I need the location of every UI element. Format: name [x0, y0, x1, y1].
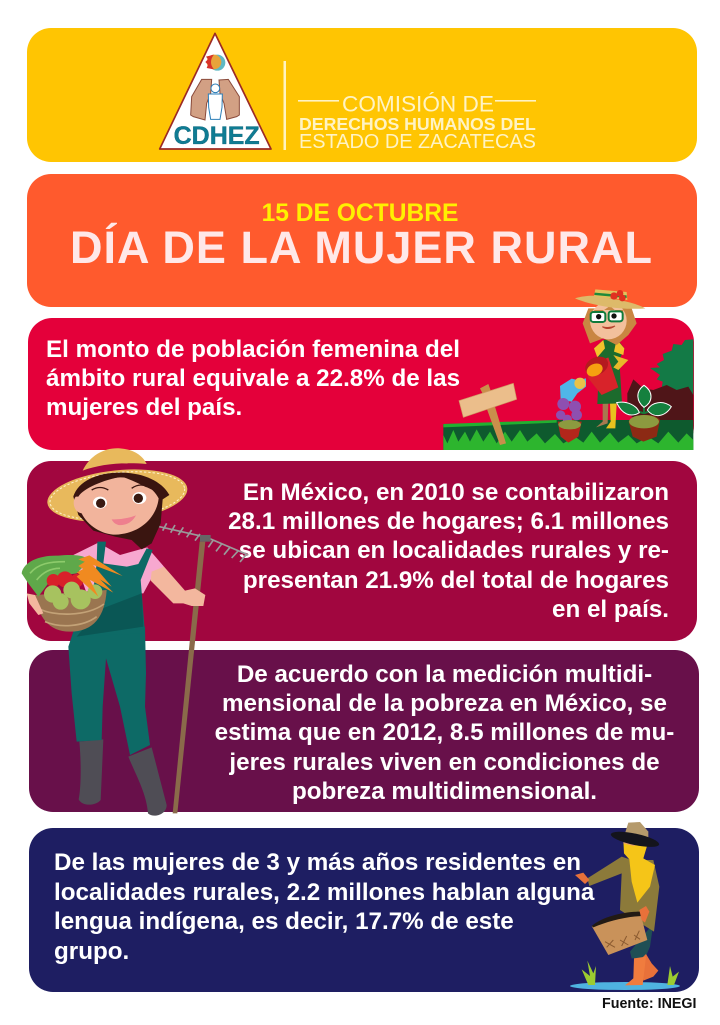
- commission name: COMISIÓN DE: [342, 92, 494, 116]
- icon: CDHEZ triangle logo: [160, 33, 271, 150]
- hat crown: [83, 448, 147, 471]
- text: rural households: en el país.: [552, 596, 669, 623]
- hair and face: [583, 308, 637, 345]
- gardener body: [596, 402, 608, 427]
- commission name: ESTADO DE ZACATECAS: [299, 131, 536, 153]
- text: rural female population: [46, 336, 460, 421]
- text: rural households: En México, en 2010 se contabilizaron: [243, 479, 669, 506]
- watering can: [587, 357, 618, 395]
- pink shirt: [73, 543, 164, 593]
- bush and rock: [650, 339, 693, 395]
- basket hand: [639, 906, 649, 923]
- puddle: [570, 982, 680, 990]
- panel: indigenous languages: [29, 828, 699, 992]
- coat: [587, 857, 659, 932]
- commission name: [298, 92, 536, 153]
- text: rural female population: El monto de población femenina del: [46, 336, 460, 363]
- divider: [284, 61, 286, 150]
- source note: Fuente: INEGI: [602, 996, 697, 1012]
- hat brim: [45, 463, 190, 528]
- text: multidimensional poverty: estima que en 2012, 8.5 millones de mu-: [215, 719, 674, 746]
- text: multidimensional poverty: mensional de la pobreza en México, se: [222, 690, 667, 717]
- text: multidimensional poverty: jeres rurales viven en condiciones de: [229, 749, 660, 776]
- commission name: DERECHOS HUMANOS DEL: [299, 114, 536, 134]
- rake: [173, 542, 205, 813]
- text: multidimensional poverty: De acuerdo con la medición multidi-: [237, 661, 652, 688]
- panel: rural households: [27, 461, 697, 641]
- text: rural households: [228, 479, 669, 623]
- overalls: [68, 627, 150, 755]
- hand: [575, 873, 589, 884]
- right potted plant: [633, 397, 657, 413]
- lettuce: [22, 555, 88, 597]
- boots: [79, 739, 103, 805]
- hat: [625, 822, 648, 842]
- hat: [575, 296, 645, 309]
- text: indigenous languages: [54, 849, 594, 965]
- apples: [44, 582, 102, 610]
- text: rural households: presentan 21.9% del total de hogares: [243, 567, 669, 594]
- main title: DÍA DE LA MUJER RURAL: [70, 222, 652, 273]
- seed basket: [592, 912, 647, 955]
- panel: title banner: [27, 174, 697, 307]
- text: rural female population: ámbito rural equivale a 22.8% de las: [46, 365, 460, 392]
- text: indigenous languages: grupo.: [54, 938, 129, 965]
- wooden sign: [487, 407, 506, 445]
- panel: multidimensional poverty: [29, 650, 699, 812]
- panel: rural female population: [28, 318, 694, 450]
- illustration: farmer sowing seeds: [570, 822, 680, 990]
- text: indigenous languages: lengua indígena, es decir, 17.7% de este: [54, 908, 514, 935]
- yellow scarf: [623, 840, 655, 903]
- carrots: [77, 555, 123, 597]
- hair: [73, 473, 169, 549]
- text: multidimensional poverty: pobreza multidimensional.: [292, 778, 597, 805]
- legs and boots: [630, 923, 653, 958]
- grass tufts: [582, 961, 596, 985]
- title block: [70, 200, 652, 273]
- text: indigenous languages: De las mujeres de 3 y más años residentes en: [54, 849, 581, 876]
- tomatoes: [47, 571, 83, 587]
- text: rural households: se ubican en localidades rurales y re-: [239, 537, 669, 564]
- grass: [443, 420, 693, 450]
- illustration: farm woman with rake and basket: [22, 448, 248, 816]
- bib and straps: [73, 542, 153, 637]
- face: [74, 477, 159, 535]
- text: rural female population: mujeres del país.: [46, 394, 242, 421]
- icon: CDHEZ triangle logo: CDHEZ: [174, 122, 260, 150]
- text: multidimensional poverty: [215, 661, 674, 805]
- left pot with flowers: [560, 378, 586, 402]
- basket: [35, 590, 107, 632]
- text: indigenous languages: localidades rurales, 2.2 millones hablan alguna: [54, 879, 594, 906]
- left hand: [27, 593, 43, 615]
- illustration: gardener with watering can: [443, 289, 693, 450]
- panel: header banner: [27, 28, 697, 162]
- logo and commission name: [158, 32, 536, 153]
- date heading: 15 DE OCTUBRE: [262, 200, 458, 227]
- arm: [151, 567, 205, 606]
- text: rural households: 28.1 millones de hogares; 6.1 millones: [228, 508, 669, 535]
